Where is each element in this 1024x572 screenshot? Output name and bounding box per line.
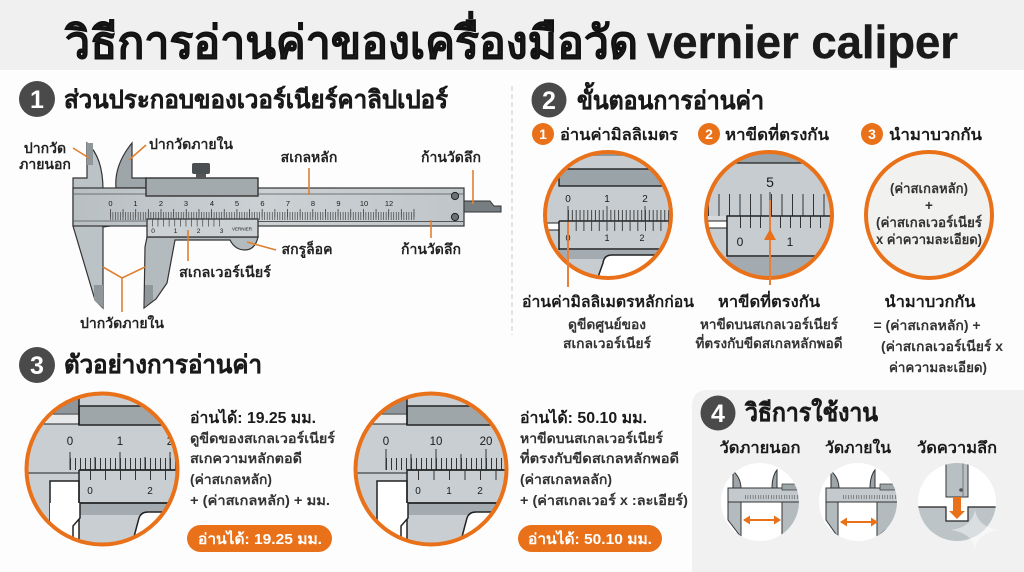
part labels: สเกลเวอร์เนียร์ [179,264,271,280]
magnifier: 50.10: 0 [415,486,421,497]
formula circle: + [925,198,933,213]
caliper diagram: 1 [133,199,138,208]
example 2 [354,390,688,552]
caliper diagram: VERNIER [232,226,253,232]
magnifier 1: 0 [565,194,571,205]
step 3: นำมาบวกกัน [889,126,982,144]
caliper diagram: 0 [151,228,155,235]
use: inside [819,438,900,541]
part labels: ปากวัด [24,140,66,156]
heading 4: วิธีการใช้งาน [744,397,878,427]
caliper diagram: 7 [286,199,290,208]
example 2 text: หาขีดบนสเกลเวอร์เนียร์ [520,430,664,446]
result pill 50.10: อ่านได้: 50.10 มม. [528,529,652,548]
step 1: ดูขีดศูนย์ของ [568,316,646,333]
example 1 [25,390,336,552]
step 3: 3 [868,126,876,142]
caliper diagram: 12 [385,199,393,208]
use: depth [917,440,996,541]
step 3: ค่าความละเอียด) [889,360,987,375]
heading 2: 2 [542,87,556,115]
step 2: 2 [705,126,713,142]
step 1: 1 [539,126,547,142]
magnifier: 19.25: 2 [167,436,173,448]
example 1 text: สเกความหลักตอดี [190,451,302,466]
panel: reading examples [19,347,688,552]
result pill 19.25: อ่านได้: 19.25 มม. [198,529,322,548]
heading 3 [19,347,262,383]
example 1 text: อ่านได้: 19.25 มม. [190,408,316,427]
magnifier 1 [540,150,680,287]
heading 2: ขั้นตอนการอ่านค่า [577,81,764,115]
step 2: หาขีดที่ตรงกัน [718,290,820,311]
sparkle watermark [951,510,999,549]
caliper diagram: 1 [174,228,178,235]
magnifier: 50.10: 1 [446,486,452,497]
magnifier: 19.25: 0 [87,486,93,497]
panel: how to use [692,390,1024,572]
step 3: (ค่าสเกลเวอร์เนียร์ x [881,338,1003,354]
magnifier: 19.25 [25,390,189,551]
title band [0,0,1024,70]
magnifier 1: 1 [604,233,610,243]
use: inside: วัดภายใน [825,438,891,457]
magnifier: 19.25: 2 [147,486,153,497]
panel: reading steps [522,81,1003,375]
use: outside: วัดภายนอก [720,440,800,457]
example 1 text [190,408,336,508]
example 2 text [520,408,688,508]
magnifier 2: 5 [766,174,774,190]
heading 2 [532,81,764,118]
magnifier: 50.10: 2 [477,486,483,497]
title [64,11,958,68]
example 2 text: ที่ตรงกับขีดสเกลหลักพอดี [520,448,679,466]
example 2 text: + (ค่าสเกลเวอร์ x :ละเอียร์) [520,492,688,508]
step 1: สเกลเวอร์เนียร์ [563,335,652,351]
step 2: หาขีดที่ตรงกัน [725,123,829,144]
heading 1: ส่วนประกอบของเวอร์เนียร์คาลิปเปอร์ [64,85,449,114]
part labels: ปากวัดภายใน [149,135,233,152]
leader lines [73,145,473,312]
formula circle: x ค่าความละเอียด) [876,232,982,247]
result pill 50.10 [518,525,662,552]
use: depth: วัดความลึก [917,439,997,457]
magnifier 1: 0 [565,233,571,243]
heading 1 [19,81,449,117]
caliper diagram: 3 [220,228,224,235]
step 2: หาขีดบนสเกลเวอร์เนียร์ [700,316,839,332]
example 1 text: (ค่าสเกลหลัก) [190,472,272,487]
part labels: ภายนอก [19,156,71,172]
caliper diagram: 5 [235,199,239,208]
caliper diagram: 2 [197,228,201,235]
part labels: สกรูล็อค [282,240,332,258]
example 1 text: + (ค่าสเกลหลัก) + มม. [190,493,330,508]
step 3: = (ค่าสเกลหลัก) + [874,318,981,333]
magnifier: 50.10: 20 [480,436,492,448]
heading 3: 3 [30,352,44,380]
caliper diagram: 8 [311,199,315,208]
magnifier 2: 1 [787,235,794,249]
magnifier 2 [704,150,834,285]
caliper diagram: 0 [108,199,113,208]
heading 3: ตัวอย่างการอ่านค่า [64,351,262,379]
step 2 [696,123,847,351]
title: vernier caliper [647,16,958,68]
heading 4: 4 [711,400,725,428]
example 1 text: ดูขีดของสเกลเวอร์เนียร์ [190,430,336,447]
caliper diagram: 10 [360,199,368,208]
caliper diagram: 4 [210,199,214,208]
part labels: ปากวัดภายใน [80,314,164,331]
caliper diagram: 6 [260,199,265,208]
panel: parts of the caliper [19,81,501,331]
step 2: ที่ตรงกับขีดสเกลหลักพอดี [696,333,842,351]
magnifier: 50.10: 10 [430,436,442,448]
step 3: นำมาบวกกัน [884,293,976,311]
step 1: อ่านค่ามิลลิเมตร [560,126,678,144]
caliper diagram [73,143,501,312]
magnifier: 50.10: 0 [383,436,389,448]
magnifier: 19.25: 0 [67,436,73,448]
part labels: สเกลหลัก [281,149,337,165]
magnifier: 50.10 [354,390,517,551]
magnifier 2: 0 [737,235,744,249]
part labels: ก้านวัดลึก [401,241,461,257]
use: outside [720,440,802,541]
title: วิธีการอ่านค่าของเครื่องมือวัด [64,11,638,68]
magnifier 1: 2 [639,233,645,243]
caliper diagram: 2 [159,199,163,208]
step 1: อ่านค่ามิลลิเมตรหลักก่อน [522,293,694,311]
magnifier: 19.25: 1 [117,436,123,448]
magnifier 1: 1 [604,194,610,205]
magnifier 1: 2 [642,194,648,205]
caliper diagram: 9 [336,199,341,208]
formula circle: (ค่าสเกลหลัก) [890,181,968,196]
heading 4 [700,396,878,430]
step 1 [522,123,694,351]
result pill 19.25 [187,525,332,552]
example 2 text: (ค่าสเกลหลลัก) [520,472,612,487]
example 2 text: อ่านได้: 50.10 มม. [520,408,647,427]
formula circle: (ค่าสเกลเวอร์เนียร์ [876,214,983,230]
part labels [19,135,481,331]
step 3 [861,123,1003,375]
formula circle [866,152,992,278]
caliper diagram: 3 [184,199,188,208]
heading 1: 1 [30,86,44,114]
part labels: ก้านวัดลึก [421,149,481,165]
